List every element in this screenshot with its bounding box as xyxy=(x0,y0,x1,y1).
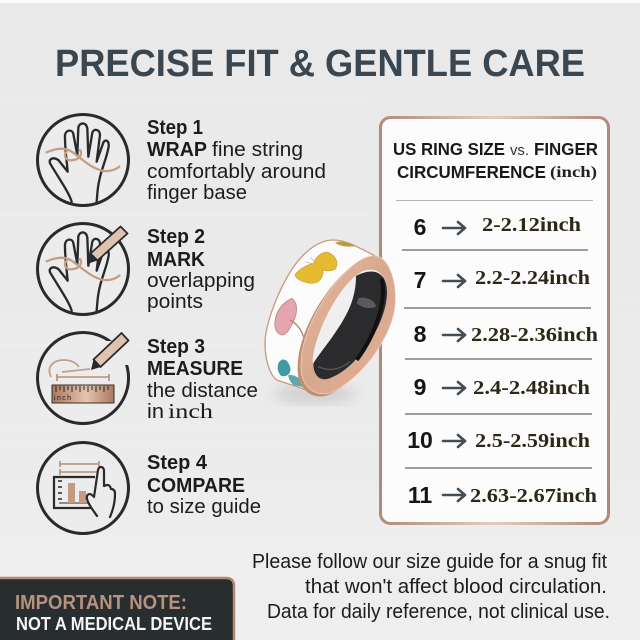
disclaimer text: that won't affect blood circulation. xyxy=(305,576,607,598)
chart heading: (inch) xyxy=(550,164,597,181)
row: size 6 xyxy=(414,214,581,240)
panel: size chart xyxy=(380,118,608,524)
icon: chart card xyxy=(54,477,95,508)
step 2 text: Step 2 xyxy=(147,226,205,248)
row: size 8: 2.28-2.36inch xyxy=(471,324,598,346)
ring band xyxy=(265,240,377,395)
icon: pointing hand xyxy=(87,467,115,517)
step 3 text: the distance xyxy=(147,380,258,402)
icon: pencil xyxy=(91,333,128,370)
step 4 text: to size guide xyxy=(147,496,261,518)
row: size 11: 2.63-2.67inch xyxy=(470,485,597,507)
row: size 11: 11 xyxy=(408,482,432,508)
step 1 text: Step 1 xyxy=(147,117,203,139)
step 4 text xyxy=(147,452,261,518)
icon: pen xyxy=(87,226,128,264)
step 3 text: Step 3 xyxy=(147,336,205,358)
icon: compare to size guide xyxy=(38,442,128,534)
step 1 text: comfortably around xyxy=(147,161,326,183)
chart heading: FINGER xyxy=(534,139,598,159)
row: size 6: 2-2.12inch xyxy=(482,214,581,236)
step 4 text: Step 4 xyxy=(147,452,208,474)
disclaimer text xyxy=(252,551,610,623)
chart heading: CIRCUMFERENCE xyxy=(397,162,546,182)
row: size 10: 10 xyxy=(407,427,433,453)
step 1 text: fine string xyxy=(212,139,303,161)
icon: wrap string around finger xyxy=(38,114,128,206)
step 2 text: MARK xyxy=(147,249,206,271)
row: size 9: 9 xyxy=(414,374,426,400)
chart heading: US RING SIZE xyxy=(393,139,505,159)
icon: mark overlapping points xyxy=(38,224,128,314)
row: size 9: 2.4-2.48inch xyxy=(473,377,590,399)
row: size 7 xyxy=(414,267,590,293)
step 3 text: in xyxy=(147,401,164,423)
step 4 text: COMPARE xyxy=(147,475,245,497)
row: size 9 xyxy=(414,374,590,400)
step 1 text xyxy=(147,117,326,204)
row: size 6: 6 xyxy=(414,214,426,240)
row: size 11 xyxy=(408,482,597,508)
icon: measure with ruler xyxy=(38,332,129,424)
step 1 text: WRAP xyxy=(147,139,207,161)
step 3 text: inch xyxy=(168,399,214,423)
important note badge xyxy=(0,578,234,640)
important note badge: NOT A MEDICAL DEVICE xyxy=(16,613,212,634)
disclaimer text: Please follow our size guide for a snug fit xyxy=(252,551,607,573)
ring bore xyxy=(313,270,387,379)
enamel flowers and butterfly xyxy=(275,242,357,388)
rose gold rim xyxy=(298,258,392,396)
row: size 7: 7 xyxy=(414,267,426,293)
step 3 text: MEASURE xyxy=(147,358,243,380)
chart heading xyxy=(393,139,598,182)
step 2 text: points xyxy=(147,291,203,313)
row: size 7: 2.2-2.24inch xyxy=(475,267,590,289)
row: size 8: 8 xyxy=(414,321,427,347)
step 2 text xyxy=(147,226,255,313)
chart heading: vs. xyxy=(510,142,529,159)
icon: ruler: inch xyxy=(54,395,71,402)
row: size 10: 2.5-2.59inch xyxy=(475,430,590,452)
row: size 8 xyxy=(414,321,598,347)
step 1 text: finger base xyxy=(147,182,247,204)
step 2 text: overlapping xyxy=(147,270,255,292)
important note badge: IMPORTANT NOTE: xyxy=(15,592,187,614)
disclaimer text: Data for daily reference, not clinical use. xyxy=(267,601,610,623)
row: size 10 xyxy=(407,427,590,453)
title: PRECISE FIT & GENTLE CARE xyxy=(55,43,585,85)
ring photo xyxy=(265,240,395,402)
step 3 text xyxy=(147,336,258,423)
